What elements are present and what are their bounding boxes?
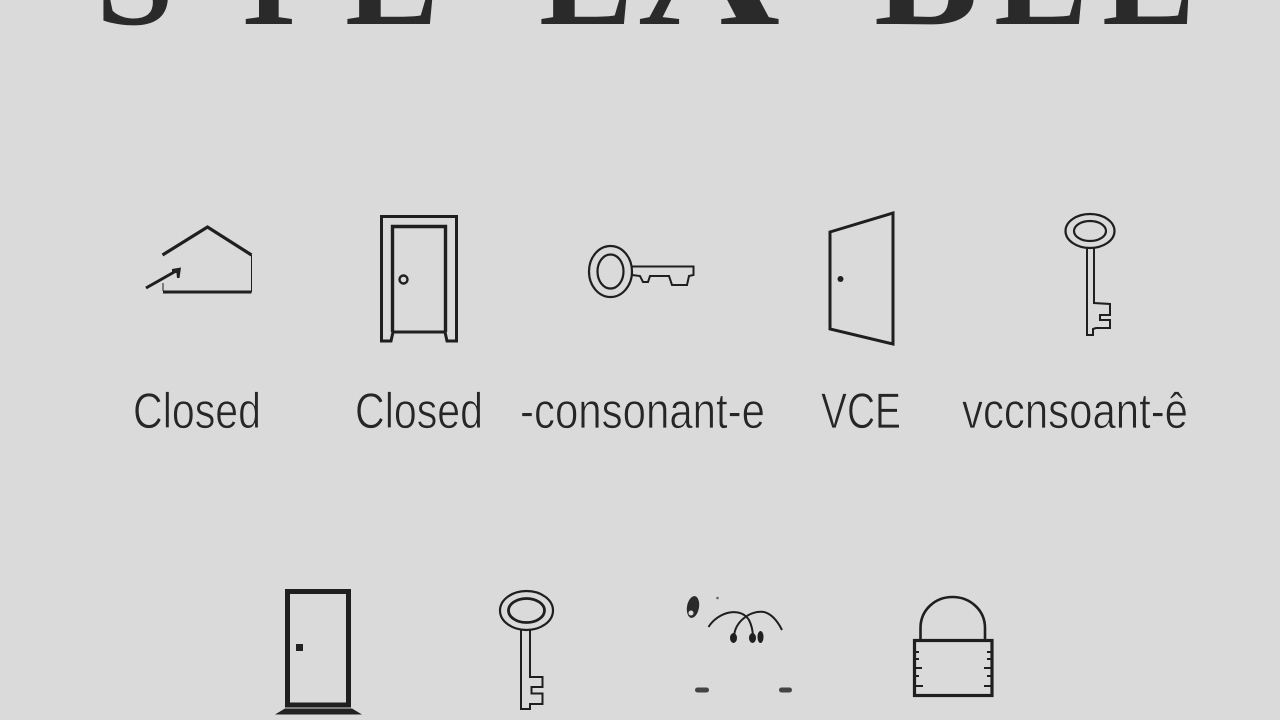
label: -consonant-e: -consonant-e (520, 383, 765, 439)
title (96, 0, 1195, 55)
label: vccnsoant-ê: vccnsoant-ê (962, 383, 1188, 439)
icon: vertical key (1066, 214, 1114, 335)
icon: padlock (914, 597, 992, 696)
label: Closed: Closed (355, 383, 483, 439)
icon: overlapping arcs with specks (685, 595, 792, 692)
label: VCE: VCE (821, 383, 901, 439)
icon: house with arrow (146, 227, 252, 292)
icon: horizontal key (589, 246, 694, 297)
icon: door in frame (382, 216, 456, 341)
icon: oval-bow key (500, 591, 553, 709)
icon: open door (830, 213, 893, 344)
label: Closed: Closed (133, 383, 261, 439)
icon: door on step (275, 592, 362, 714)
